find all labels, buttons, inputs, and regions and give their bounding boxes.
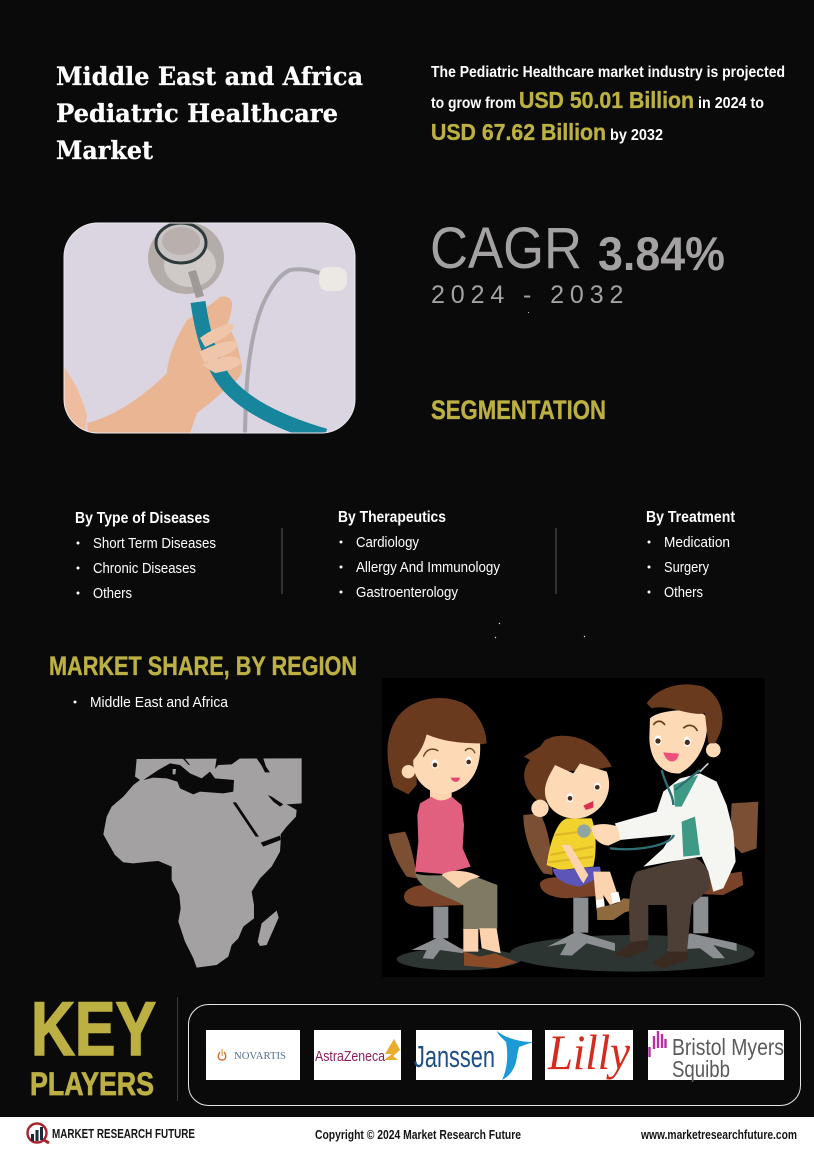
CAGR figure: 2024 - 2032 [431, 281, 629, 309]
heading: key players [30, 987, 156, 1102]
logo: Janssen [414, 1030, 533, 1080]
title: Pediatric Healthcare [56, 99, 338, 128]
title [56, 62, 363, 165]
heading: segmentation: SEGMENTATION [431, 395, 606, 425]
segment list: by therapeutics: Allergy And Immunology [356, 559, 500, 576]
segment list: by therapeutics [338, 509, 500, 601]
segment list: by treatment [646, 509, 736, 601]
illustration: parent, child and doctor [382, 678, 765, 977]
CAGR figure: CAGR [430, 216, 582, 281]
panel: key player logos [188, 1004, 800, 1106]
title: Middle East and Africa [56, 62, 363, 91]
child [524, 736, 642, 920]
logo: Bristol Myers Squibb: Squibb [672, 1056, 730, 1082]
market projection text: USD 50.01 Billion [519, 87, 694, 113]
CAGR figure [430, 216, 725, 309]
logo: Bristol Myers Squibb [648, 1030, 784, 1082]
segment list: by treatment: Surgery [664, 559, 709, 576]
region list: Middle East and Africa [90, 694, 229, 711]
market projection text: in 2024 to [698, 95, 764, 112]
footer brand name: MARKET RESEARCH FUTURE [52, 1126, 195, 1141]
title: Market [56, 136, 153, 165]
segment list: by therapeutics: By Therapeutics [338, 509, 446, 526]
photo: baby hand holding stethoscope [62, 222, 355, 436]
mother chair [388, 832, 465, 959]
map: Middle East and Africa [103, 758, 302, 968]
segment list: by type of diseases: Short Term Diseases [93, 535, 216, 552]
footer copyright: Copyright © 2024 Market Research Future [315, 1127, 521, 1142]
segment list: by type of diseases: By Type of Diseases [75, 510, 210, 527]
segment list: by treatment: By Treatment [646, 509, 736, 526]
footer bar [0, 1117, 814, 1150]
segment list: by therapeutics: Gastroenterology [356, 584, 458, 601]
heading: key players: KEY [31, 987, 156, 1072]
segment list: by type of diseases: Others [93, 585, 132, 602]
segment list: by type of diseases [75, 510, 216, 602]
logo: Lilly: Lilly [547, 1024, 631, 1080]
logo: Novartis [206, 1030, 300, 1080]
heading: key players: PLAYERS [30, 1066, 154, 1102]
child chair [523, 813, 615, 956]
segment list: by treatment: Others [664, 584, 703, 601]
segment list: by therapeutics: Cardiology [356, 534, 419, 551]
CAGR figure: 3.84% [598, 227, 725, 280]
market projection text: USD 67.62 Billion [431, 119, 606, 145]
market projection text: to grow from [431, 95, 516, 112]
mother [387, 698, 517, 968]
segment list: by type of diseases: Chronic Diseases [93, 560, 196, 577]
logo: Janssen: Janssen [414, 1039, 495, 1074]
doctor [577, 684, 736, 968]
doctor chair [665, 802, 758, 958]
logo: Bristol Myers Squibb: Bristol Myers [672, 1034, 784, 1060]
floor shadows [397, 935, 755, 972]
logo: AstraZeneca [314, 1030, 401, 1080]
market projection text: by 2032 [610, 127, 663, 144]
segment list: by treatment: Medication [664, 534, 730, 551]
heading: market share by region: MARKET SHARE, BY REGION [49, 651, 357, 681]
market projection text [431, 64, 785, 145]
logo: AstraZeneca: AstraZeneca [315, 1048, 386, 1065]
logo: Novartis: NOVARTIS [234, 1051, 286, 1062]
footer logo icon [28, 1124, 49, 1143]
